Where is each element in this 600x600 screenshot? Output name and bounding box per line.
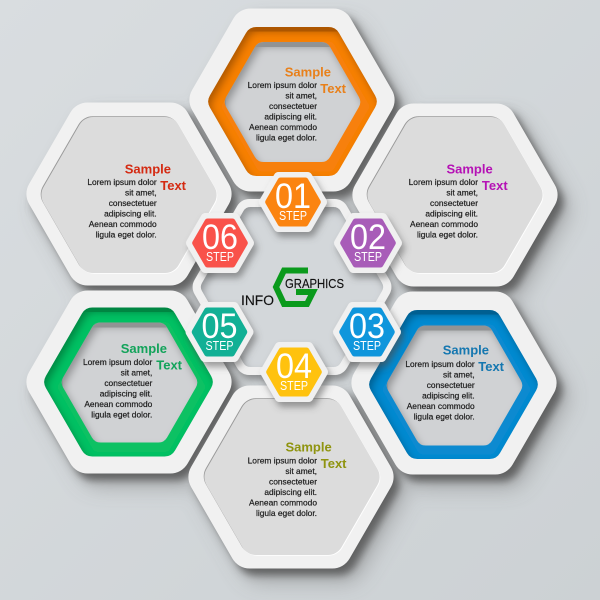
panel: 01 orange top: consectetuer <box>269 101 317 111</box>
panel: 05 green lower left: adipiscing elit. <box>100 388 152 398</box>
panel: 05 green lower left <box>46 310 212 454</box>
panel: 01 orange top: Sample <box>285 64 331 80</box>
step 01 badge <box>264 177 322 227</box>
icon: green hexagonal G <box>276 270 313 304</box>
step 02 badge: STEP <box>354 250 382 264</box>
panel: 05 green lower left: consectetuer <box>104 378 153 388</box>
panel: 06 red upper left: ligula eget dolor. <box>96 229 157 239</box>
centre logo: INFO G GRAPHICS: INFO <box>241 292 274 308</box>
panel: 04 yellow bottom: ligula eget dolor. <box>256 508 317 518</box>
step 02 badge: 02 <box>350 218 386 257</box>
panel: 06 red upper left: adipiscing elit. <box>104 208 157 218</box>
panel: 06 red upper left: Sample <box>125 162 171 176</box>
step 03 badge: 03 <box>349 307 385 346</box>
panel: 02 purple upper right: Lorem ipsum dolor <box>409 177 478 187</box>
panel: 01 orange top: Aenean commodo <box>249 122 317 132</box>
panel: 04 yellow bottom: Lorem ipsum dolor <box>248 456 317 466</box>
panel: 01 orange top: Text <box>320 81 347 96</box>
panel: 01 orange top <box>209 28 375 172</box>
step 06 badge: 06 <box>202 218 238 257</box>
panel: 01 orange top: adipiscing elit. <box>264 111 317 121</box>
panel: 04 yellow bottom <box>208 406 374 548</box>
panel: 03 blue lower right: sit amet, <box>443 370 475 380</box>
step 06 badge <box>191 218 249 268</box>
panel: 05 green lower left: Sample <box>121 341 167 356</box>
step 03 badge <box>338 307 396 357</box>
panel: 04 yellow bottom: consectetuer <box>269 476 317 486</box>
step 01 badge: 01 <box>275 177 311 216</box>
panel: 04 yellow bottom: adipiscing elit. <box>264 487 317 497</box>
panel: 06 red upper left: Text <box>160 178 187 193</box>
step 03 badge: STEP <box>353 339 381 353</box>
panel: 06 red upper left <box>46 122 212 266</box>
panel: 02 purple upper right: Sample <box>446 162 493 176</box>
panel: 06 red upper left: sit amet, <box>125 188 157 198</box>
step 04 badge: STEP <box>280 379 308 393</box>
panel: 02 purple upper right: Aenean commodo <box>410 219 478 229</box>
panel: 05 green lower left: sit amet, <box>121 368 152 378</box>
centre logo: INFO G GRAPHICS: GRAPHICS <box>285 277 344 291</box>
panel: 03 blue lower right: Aenean commodo <box>407 401 475 411</box>
panel: 02 purple upper right: sit amet, <box>446 188 478 198</box>
panel: 04 yellow bottom: sit amet, <box>285 466 317 476</box>
panel: 02 purple upper right: adipiscing elit. <box>425 208 478 218</box>
panel: 02 purple upper right: ligula eget dolor. <box>417 229 478 239</box>
step 04 badge: 04 <box>276 347 312 386</box>
panel: 03 blue lower right: adipiscing elit. <box>422 390 475 400</box>
panel: 01 orange top: ligula eget dolor. <box>256 132 317 142</box>
panel: 04 yellow bottom: Text <box>321 456 347 471</box>
panel: 06 red upper left: Lorem ipsum dolor <box>87 177 157 187</box>
panel: 03 blue lower right <box>371 312 537 454</box>
panel: 06 red upper left: Aenean commodo <box>89 219 157 229</box>
panel: 02 purple upper right: consectetuer <box>430 198 478 208</box>
shadows of the six large hexagons <box>46 28 538 548</box>
panel: 06 red upper left: consectetuer <box>109 198 157 208</box>
panel: 01 orange top: sit amet, <box>285 90 317 100</box>
centre logo: INFO G GRAPHICS <box>241 270 344 308</box>
step 05 badge <box>191 307 248 357</box>
panel: 04 yellow bottom: Aenean commodo <box>249 498 317 508</box>
panel: 02 purple upper right: Text <box>482 178 508 193</box>
panel: 04 yellow bottom: Sample <box>285 440 332 454</box>
step 02 badge <box>339 218 397 268</box>
step 01 badge: STEP <box>279 209 307 223</box>
panel: 02 purple upper right <box>372 124 538 266</box>
panel: 01 orange top: Lorem ipsum dolor <box>248 80 317 90</box>
step 05 badge: 05 <box>202 307 238 346</box>
panel: 03 blue lower right: Sample <box>443 342 489 358</box>
panel: 05 green lower left: Aenean commodo <box>84 399 153 409</box>
panel: 05 green lower left: ligula eget dolor. <box>91 409 152 419</box>
centre connecting ring <box>207 213 377 361</box>
step 05 badge: STEP <box>206 339 234 353</box>
panel: 03 blue lower right: Text <box>478 359 505 374</box>
panel: 03 blue lower right: consectetuer <box>427 380 475 390</box>
panel: 05 green lower left: Lorem ipsum dolor <box>83 357 153 367</box>
panel: 03 blue lower right: Lorem ipsum dolor <box>405 359 475 369</box>
step 04 badge <box>265 347 323 397</box>
panel: 03 blue lower right: ligula eget dolor. <box>414 411 475 421</box>
panel: 05 green lower left: Text <box>156 358 183 372</box>
step 06 badge: STEP <box>206 250 234 264</box>
